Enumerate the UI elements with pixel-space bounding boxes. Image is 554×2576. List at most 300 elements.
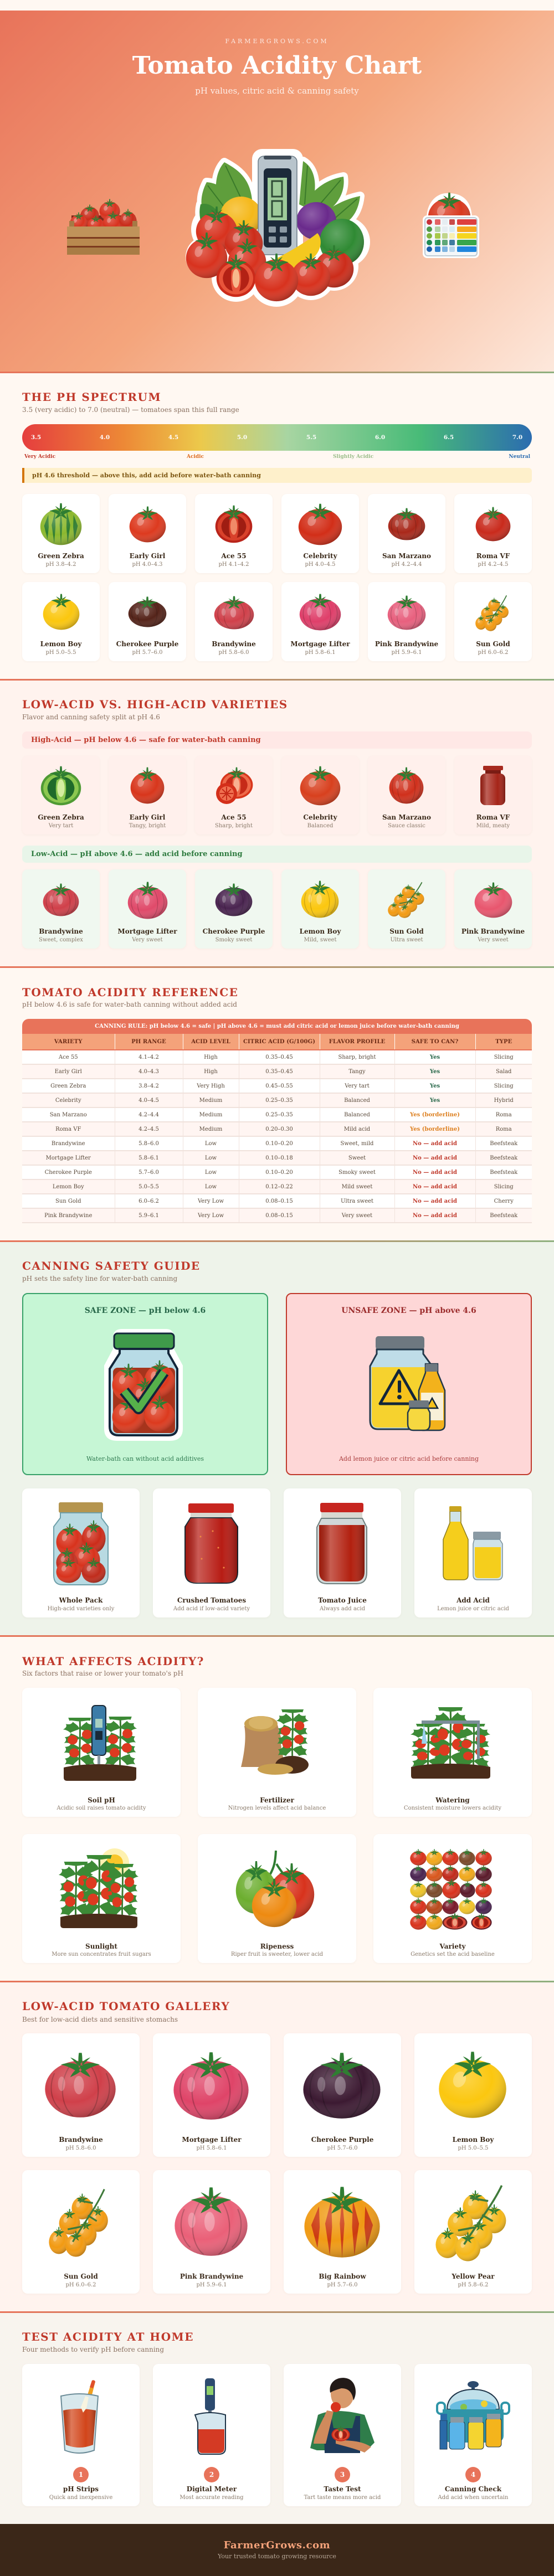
icon: pH meter with vegetables sticker xyxy=(186,149,370,307)
panel: test acidity at home xyxy=(0,2313,554,2524)
heading: TOMATO ACIDITY REFERENCE xyxy=(22,986,238,999)
icon: yellow pear cluster xyxy=(435,2184,511,2261)
card: Tomato Juice xyxy=(284,1488,401,1617)
pH: pH 4.1–4.2 xyxy=(218,561,249,568)
acidity table: 0.10–0.20 xyxy=(265,1141,293,1146)
name: Early Girl xyxy=(130,552,165,560)
acidity table: 0.20–0.30 xyxy=(265,1126,293,1132)
footer tagline: Your trusted tomato growing resource xyxy=(218,2553,336,2560)
note: Consistent moisture lowers acidity xyxy=(404,1805,501,1811)
card: Roma VF xyxy=(454,756,532,834)
high-acid banner xyxy=(22,731,532,749)
step number xyxy=(335,2467,350,2482)
name: Pink Brandywine xyxy=(180,2273,243,2280)
acidity table: 5.0–5.5 xyxy=(138,1184,159,1189)
acidity table: 0.25–0.35 xyxy=(265,1098,293,1103)
icon: person tasting tomato xyxy=(307,2377,376,2453)
note: Add acid if low-acid variety xyxy=(173,1606,250,1612)
step number: 3 xyxy=(340,2471,345,2479)
acidity table: Very sweet xyxy=(342,1213,372,1218)
acidity table: Sharp, bright xyxy=(338,1054,376,1060)
name: Brandywine xyxy=(59,2136,103,2144)
acidity table: 0.35–0.45 xyxy=(265,1054,293,1060)
card: Cherokee Purple xyxy=(284,2033,401,2157)
acidity table: Beefsteak xyxy=(490,1141,517,1146)
pH gradient bar: 4.5 xyxy=(168,434,178,441)
pH: pH 5.0–5.5 xyxy=(458,2145,489,2151)
icon: green zebra tomato xyxy=(40,503,82,545)
name: Mortgage Lifter xyxy=(290,640,350,648)
heading: WHAT AFFECTS ACIDITY? xyxy=(22,1655,204,1668)
name: Cherokee Purple xyxy=(203,928,265,935)
icon: ribbed tomato xyxy=(43,884,79,916)
pH: pH 4.0–4.5 xyxy=(305,561,336,568)
card: Sun Gold xyxy=(454,582,532,661)
icon: striped tomato xyxy=(304,2186,381,2258)
name: Brandywine xyxy=(212,640,256,648)
scale label: very acidic: Very Acidic xyxy=(24,454,55,460)
icon: tomato xyxy=(174,2187,248,2256)
name: Ace 55 xyxy=(221,552,247,560)
panel: reference table xyxy=(0,968,554,1240)
name: Variety xyxy=(439,1943,465,1950)
heading: LOW-ACID TOMATO GALLERY xyxy=(22,2000,230,2013)
flavor: Very sweet xyxy=(478,937,509,943)
card: Soil pH xyxy=(22,1688,181,1817)
icon: purple tomato xyxy=(215,884,253,916)
acidity table: Mortgage Lifter xyxy=(46,1155,91,1161)
card: Pink Brandywine xyxy=(454,869,532,949)
panel: the pH spectrum xyxy=(0,373,554,679)
acidity table: 0.08–0.15 xyxy=(265,1213,293,1218)
name: Sun Gold xyxy=(476,640,510,648)
name: Celebrity xyxy=(303,813,337,821)
icon: jar of tomato juice xyxy=(316,1503,367,1584)
card: Lemon Boy xyxy=(414,2033,532,2157)
heading: CANNING SAFETY GUIDE xyxy=(22,1259,201,1272)
icon: jar of crushed tomatoes xyxy=(184,1503,238,1584)
pH: pH 5.7–6.0 xyxy=(327,2282,358,2288)
icon: sliced tomato xyxy=(216,767,253,804)
name: Big Rainbow xyxy=(319,2273,366,2280)
acidity table: Green Zebra xyxy=(50,1083,86,1089)
acidity table: Smoky sweet xyxy=(338,1169,376,1175)
card: San Marzano xyxy=(368,756,445,834)
card: Variety xyxy=(373,1834,532,1963)
icon: tomato xyxy=(302,2052,381,2119)
acidity table: San Marzano xyxy=(50,1112,87,1117)
name: pH Strips xyxy=(63,2485,99,2493)
acidity table: Cherry xyxy=(494,1198,514,1204)
acidity table: Medium xyxy=(199,1126,222,1132)
card: Whole Pack xyxy=(22,1488,140,1617)
pH: pH 5.0–5.5 xyxy=(45,650,76,656)
name: Fertilizer xyxy=(260,1796,294,1804)
card: Yellow Pear xyxy=(414,2170,532,2294)
hero banner xyxy=(0,11,554,372)
acidity table: 4.0–4.5 xyxy=(138,1098,159,1103)
note: Riper fruit is sweeter, lower acid xyxy=(231,1951,323,1957)
panel: canning safety guide xyxy=(0,1242,554,1635)
icon: tomato xyxy=(389,767,423,804)
icon: orange cluster xyxy=(388,882,424,918)
name: Taste Test xyxy=(324,2485,361,2493)
name: Whole Pack xyxy=(59,1596,102,1604)
card: Ripeness xyxy=(198,1834,356,1963)
site label: FARMERGROWS.COM xyxy=(225,38,329,45)
name: Roma VF xyxy=(476,552,510,560)
card: Cherokee Purple xyxy=(195,869,273,949)
note: Nitrogen levels affect acid balance xyxy=(228,1805,326,1811)
name: Cherokee Purple xyxy=(116,640,178,648)
card: Cherokee Purple xyxy=(109,582,186,661)
acidity table: Beefsteak xyxy=(490,1213,517,1218)
name: Brandywine xyxy=(39,928,83,935)
icon: tomato xyxy=(438,2051,507,2119)
scale label: acidic: Acidic xyxy=(187,454,204,460)
card: Big Rainbow xyxy=(284,2170,401,2294)
card: taste test xyxy=(284,2364,401,2506)
acidity table: PH RANGE xyxy=(131,1039,166,1044)
name: Add Acid xyxy=(456,1596,490,1604)
acidity table: 4.1–4.2 xyxy=(138,1054,159,1060)
pH gradient bar: 4.0 xyxy=(100,434,110,441)
note: Acidic soil raises tomato acidity xyxy=(57,1805,146,1811)
name: Yellow Pear xyxy=(452,2273,495,2280)
acidity table: 3.8–4.2 xyxy=(138,1083,159,1089)
icon: green tomato half xyxy=(41,766,81,805)
acidity table: Celebrity xyxy=(55,1098,81,1103)
pH gradient bar: 7.0 xyxy=(512,434,522,441)
unsafe zone note: Add lemon juice or citric acid before canning xyxy=(339,1455,479,1462)
step number xyxy=(204,2467,219,2482)
card: Lemon Boy xyxy=(281,869,359,949)
name: Mortgage Lifter xyxy=(182,2136,242,2144)
acidity table: High xyxy=(204,1069,218,1074)
acidity table xyxy=(22,1034,532,1223)
icon: acidity chart with tomato xyxy=(423,193,479,258)
note: Genetics set the acid baseline xyxy=(411,1951,495,1957)
icon: tomato xyxy=(131,767,164,804)
canning rule banner: CANNING RULE: pH below 4.6 = safe | pH above 4.6 = must add citric acid or lemon juice before water-bath canning xyxy=(95,1023,459,1029)
name: San Marzano xyxy=(382,813,431,821)
panel: low-acid gallery xyxy=(0,1982,554,2311)
subheading: Six factors that raise or lower your tomato's pH xyxy=(22,1670,183,1677)
card: Watering xyxy=(373,1688,532,1817)
acidity table: Sun Gold xyxy=(55,1198,81,1204)
acidity table: Ace 55 xyxy=(59,1054,78,1060)
flavor: Balanced xyxy=(307,823,333,829)
acidity table: 0.25–0.35 xyxy=(265,1112,293,1117)
acidity table: ACID LEVEL xyxy=(191,1039,230,1044)
footer brand: FarmerGrows.com xyxy=(224,2539,330,2551)
name: Mortgage Lifter xyxy=(117,928,177,935)
acidity table: Salad xyxy=(496,1069,511,1074)
icon: dark tomato xyxy=(129,597,166,627)
name: Green Zebra xyxy=(38,552,84,560)
card: Sunlight xyxy=(22,1834,181,1963)
icon: jar of whole tomatoes xyxy=(53,1502,109,1585)
step number xyxy=(73,2467,89,2482)
icon: glass with pH strip xyxy=(61,2379,98,2454)
step number: 1 xyxy=(79,2471,83,2479)
icon: pink tomato xyxy=(299,594,341,630)
card: Celebrity xyxy=(281,494,359,573)
name: Digital Meter xyxy=(187,2485,237,2493)
note: Always add acid xyxy=(320,1606,365,1612)
acidity table: Balanced xyxy=(344,1098,370,1103)
acidity table: Slicing xyxy=(494,1184,514,1189)
acidity table: Tangy xyxy=(348,1069,366,1074)
name: Roma VF xyxy=(476,813,510,821)
note: High-acid varieties only xyxy=(48,1606,114,1612)
acidity table: Sweet, mild xyxy=(341,1141,373,1146)
card: Pink Brandywine xyxy=(368,582,445,661)
low-acid banner xyxy=(22,846,532,863)
flavor: Sauce classic xyxy=(388,823,425,829)
name: Lemon Boy xyxy=(453,2136,494,2144)
pH: pH 6.0–6.2 xyxy=(478,650,509,656)
acidity table: SAFE TO CAN? xyxy=(412,1039,458,1044)
acidity table: Roma VF xyxy=(55,1126,81,1132)
card: Green Zebra xyxy=(22,494,100,573)
pH: pH 5.7–6.0 xyxy=(327,2145,358,2151)
acidity table: Beefsteak xyxy=(490,1169,517,1175)
title: Tomato Acidity Chart xyxy=(132,51,422,80)
name: Sunlight xyxy=(85,1943,117,1950)
acidity table: No — add acid xyxy=(413,1141,457,1146)
name: Tomato Juice xyxy=(318,1596,367,1604)
acidity table: 5.8–6.1 xyxy=(138,1155,159,1161)
icon: lemon juice and citric acid xyxy=(443,1506,503,1580)
pH: pH 4.2–4.5 xyxy=(478,561,509,568)
acidity table: 0.35–0.45 xyxy=(265,1069,293,1074)
icon: pink tomato xyxy=(127,882,167,919)
pH: pH 5.8–6.0 xyxy=(218,650,249,656)
card: pH strips xyxy=(22,2364,140,2506)
card: Celebrity xyxy=(281,756,359,834)
icon: tomato crate xyxy=(67,199,140,255)
name: Lemon Boy xyxy=(40,640,81,648)
top strip xyxy=(0,0,554,11)
pH: pH 5.8–6.2 xyxy=(458,2282,489,2288)
card: digital meter xyxy=(153,2364,270,2506)
acidity table: Ultra sweet xyxy=(341,1198,373,1204)
acidity table: 0.08–0.15 xyxy=(265,1198,293,1204)
pH: pH 5.9–6.1 xyxy=(196,2282,227,2288)
panel: what affects acidity xyxy=(0,1637,554,1981)
card: Crushed Tomatoes xyxy=(153,1488,270,1617)
safe zone note: Water-bath can without acid additives xyxy=(86,1455,204,1462)
name: Soil pH xyxy=(88,1796,115,1804)
pH: pH 5.8–6.1 xyxy=(305,650,336,656)
heading: TEST ACIDITY AT HOME xyxy=(22,2330,194,2343)
acidity table: Yes xyxy=(430,1083,440,1089)
pH gradient bar xyxy=(22,424,532,451)
step number xyxy=(465,2467,481,2482)
acidity table: Sweet xyxy=(348,1155,366,1161)
card: Lemon Boy xyxy=(22,582,100,661)
step number: 2 xyxy=(209,2471,214,2479)
acidity table: 5.9–6.1 xyxy=(138,1213,159,1218)
icon: pink tomato xyxy=(474,883,512,918)
name: Ace 55 xyxy=(221,813,247,821)
note: Tart taste means more acid xyxy=(304,2495,381,2501)
icon: yellow tomato xyxy=(43,594,80,630)
name: Ripeness xyxy=(260,1943,294,1950)
name: Pink Brandywine xyxy=(375,640,438,648)
card: Sun Gold xyxy=(22,2170,140,2294)
acidity table: No — add acid xyxy=(413,1213,457,1218)
flavor: Sweet, complex xyxy=(39,937,83,943)
name: Celebrity xyxy=(303,552,337,560)
subheading: pH below 4.6 is safe for water-bath canning without added acid xyxy=(22,1001,237,1008)
acidity table: No — add acid xyxy=(413,1198,457,1204)
pH: pH 6.0–6.2 xyxy=(65,2282,96,2288)
acidity table: 4.2–4.5 xyxy=(138,1126,159,1132)
icon: soil probe and plants xyxy=(63,1705,137,1781)
icon: fertilizer sack and plant xyxy=(241,1709,309,1775)
note: More sun concentrates fruit sugars xyxy=(52,1951,151,1957)
acidity table: Yes xyxy=(430,1054,440,1060)
note: Quick and inexpensive xyxy=(49,2495,112,2501)
acidity table: Yes (borderline) xyxy=(410,1126,460,1132)
card: Mortgage Lifter xyxy=(153,2033,270,2157)
icon: tomato xyxy=(44,2052,116,2118)
acidity table: No — add acid xyxy=(413,1155,457,1161)
card: Ace 55 xyxy=(195,756,273,834)
icon: ribbed tomato xyxy=(214,596,254,629)
panel: unsafe zone xyxy=(286,1293,532,1475)
card: Green Zebra xyxy=(22,756,100,834)
acidity table: TYPE xyxy=(495,1039,512,1044)
low-acid banner: Low-Acid — pH above 4.6 — add acid before canning xyxy=(31,850,243,858)
name: Early Girl xyxy=(130,813,165,821)
icon: tomato xyxy=(475,507,511,542)
pH: pH 5.8–6.0 xyxy=(65,2145,96,2151)
flavor: Tangy, bright xyxy=(129,823,166,829)
icon: halved tomato xyxy=(215,505,253,543)
name: Green Zebra xyxy=(38,813,84,821)
acidity table: 4.2–4.4 xyxy=(138,1112,159,1117)
card: Mortgage Lifter xyxy=(109,869,186,949)
pH gradient bar: 5.5 xyxy=(306,434,316,441)
high-acid banner: High-Acid — pH below 4.6 — safe for water-bath canning xyxy=(31,736,261,744)
acidity table: Slicing xyxy=(494,1054,514,1060)
icon: meter in beaker xyxy=(193,2378,226,2454)
acidity table: Early Girl xyxy=(55,1069,82,1074)
card: Sun Gold xyxy=(368,869,445,949)
pH: pH 5.7–6.0 xyxy=(132,650,163,656)
acidity table: No — add acid xyxy=(413,1169,457,1175)
icon: green, red and orange tomatoes xyxy=(236,1851,315,1927)
footer xyxy=(0,2524,554,2576)
icon: tomato xyxy=(298,504,342,545)
acidity table: FLAVOR PROFILE xyxy=(329,1039,385,1044)
note: Add acid when uncertain xyxy=(438,2495,508,2501)
icon: orange cluster xyxy=(49,2188,112,2257)
acidity table: Roma xyxy=(496,1112,512,1117)
icon: irrigated plants xyxy=(411,1707,490,1779)
icon: tomato xyxy=(173,2052,249,2120)
acidity table: Brandywine xyxy=(52,1141,85,1146)
name: Pink Brandywine xyxy=(461,928,525,935)
pH: pH 4.0–4.3 xyxy=(132,561,163,568)
flavor: Smoky sweet xyxy=(216,937,252,943)
acidity table: Medium xyxy=(199,1112,222,1117)
acidity table: Very High xyxy=(197,1083,225,1089)
subheading: 3.5 (very acidic) to 7.0 (neutral) — tomatoes span this full range xyxy=(22,406,239,414)
acidity table: Beefsteak xyxy=(490,1155,517,1161)
name: San Marzano xyxy=(382,552,431,560)
acidity table: Yes (borderline) xyxy=(410,1112,460,1117)
name: Sun Gold xyxy=(64,2273,98,2280)
acidity table: Roma xyxy=(496,1126,512,1132)
acidity table: Lemon Boy xyxy=(53,1184,84,1189)
icon: jars with warning xyxy=(369,1336,445,1431)
scale label: slightly acidic: Slightly Acidic xyxy=(333,454,373,460)
acidity table: Low xyxy=(205,1155,217,1161)
subheading: Best for low-acid diets and sensitive stomachs xyxy=(22,2016,178,2023)
safe zone title: SAFE ZONE — pH below 4.6 xyxy=(85,1306,206,1315)
acidity table: Very tart xyxy=(345,1083,370,1089)
pH gradient bar: 5.0 xyxy=(237,434,247,441)
panel: safe zone xyxy=(22,1293,268,1475)
card: Early Girl xyxy=(109,756,186,834)
acidity table: Mild sweet xyxy=(342,1184,372,1189)
note: Most accurate reading xyxy=(179,2495,244,2501)
panel: low-acid vs high-acid xyxy=(0,681,554,966)
acidity table: 5.8–6.0 xyxy=(138,1141,159,1146)
acidity table: Cherokee Purple xyxy=(45,1169,92,1175)
name: Watering xyxy=(435,1796,470,1804)
card: Early Girl xyxy=(109,494,186,573)
flavor: Very sweet xyxy=(132,937,163,943)
card: San Marzano xyxy=(368,494,445,573)
card: canning check xyxy=(414,2364,532,2506)
icon: orange cherry cluster xyxy=(475,595,509,631)
subheading: pH sets the safety line for water-bath canning xyxy=(22,1275,177,1282)
acidity table: Low xyxy=(205,1184,217,1189)
name: Crushed Tomatoes xyxy=(177,1596,246,1604)
acidity table: Low xyxy=(205,1169,217,1175)
acidity table: Very Low xyxy=(198,1213,224,1218)
subheading: Four methods to verify pH before canning xyxy=(22,2346,164,2353)
name: Sun Gold xyxy=(389,928,424,935)
flavor: Mild, sweet xyxy=(304,937,336,943)
card: Brandywine xyxy=(22,2033,140,2157)
icon: yellow tomato xyxy=(301,880,339,918)
acidity table: 4.0–4.3 xyxy=(138,1069,159,1074)
card: Ace 55 xyxy=(195,494,273,573)
acidity table: 0.45–0.55 xyxy=(265,1083,293,1089)
pH: pH 3.8–4.2 xyxy=(45,561,76,568)
step number: 4 xyxy=(471,2471,475,2479)
pH: pH 5.8–6.1 xyxy=(196,2145,227,2151)
flavor: Mild, meaty xyxy=(476,823,510,829)
pH gradient bar: 6.5 xyxy=(444,434,454,441)
acidity table: Balanced xyxy=(344,1112,370,1117)
threshold callout xyxy=(22,468,532,483)
heading: THE PH SPECTRUM xyxy=(22,390,161,404)
pH gradient bar: 6.0 xyxy=(375,434,385,441)
icon: canning pot and bottles xyxy=(437,2381,510,2450)
card: Pink Brandywine xyxy=(153,2170,270,2294)
card: Fertilizer xyxy=(198,1688,356,1817)
acidity table: 0.12–0.22 xyxy=(265,1184,293,1189)
acidity table: Mild acid xyxy=(344,1126,370,1132)
acidity table: Medium xyxy=(199,1098,222,1103)
